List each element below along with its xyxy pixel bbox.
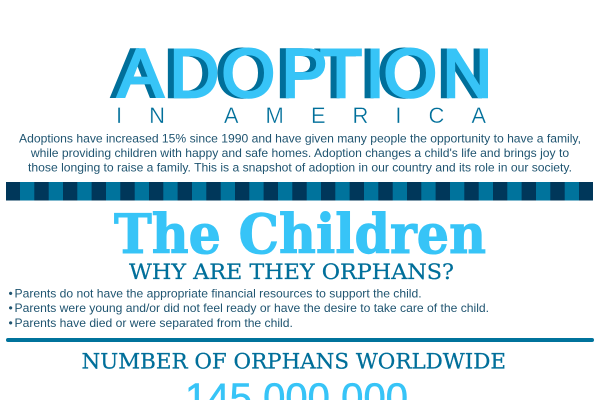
bullet list of reasons: • [8, 316, 13, 330]
title: Adoption: ADOPTION [112, 35, 486, 112]
subheading: why are they orphans: WHY ARE THEY ORPHANS? [129, 260, 454, 285]
intro paragraph [19, 132, 581, 174]
section divider line [6, 338, 594, 342]
intro paragraph: those longing to raise a family. This is a snapshot of adoption in our country and its role in our society. [28, 160, 572, 174]
intro paragraph: while providing children with happy and safe homes. Adoption changes a child's life and brings joy to [30, 146, 569, 160]
title: Adoption: ADOPTION [118, 35, 492, 112]
bullet list of reasons: • [8, 286, 13, 300]
bullet list of reasons: Parents have died or were separated from the child. [14, 316, 293, 330]
heading: number of orphans worldwide: NUMBER OF ORPHANS WORLDWIDE [82, 350, 506, 374]
intro paragraph: Adoptions have increased 15% since 1990 and have given many people the opportunity to have a family, [19, 132, 581, 146]
bullet list of reasons [8, 286, 489, 330]
bullet list of reasons: Parents were young and/or did not feel ready or have the desire to take care of the child. [14, 301, 489, 315]
subtitle: In America: IN AMERICA [116, 103, 486, 128]
bullet list of reasons: Parents do not have the appropriate financial resources to support the child. [14, 286, 422, 300]
heading: The Children: The Children [114, 202, 486, 266]
bullet list of reasons: • [8, 301, 13, 315]
striped divider [6, 182, 593, 200]
